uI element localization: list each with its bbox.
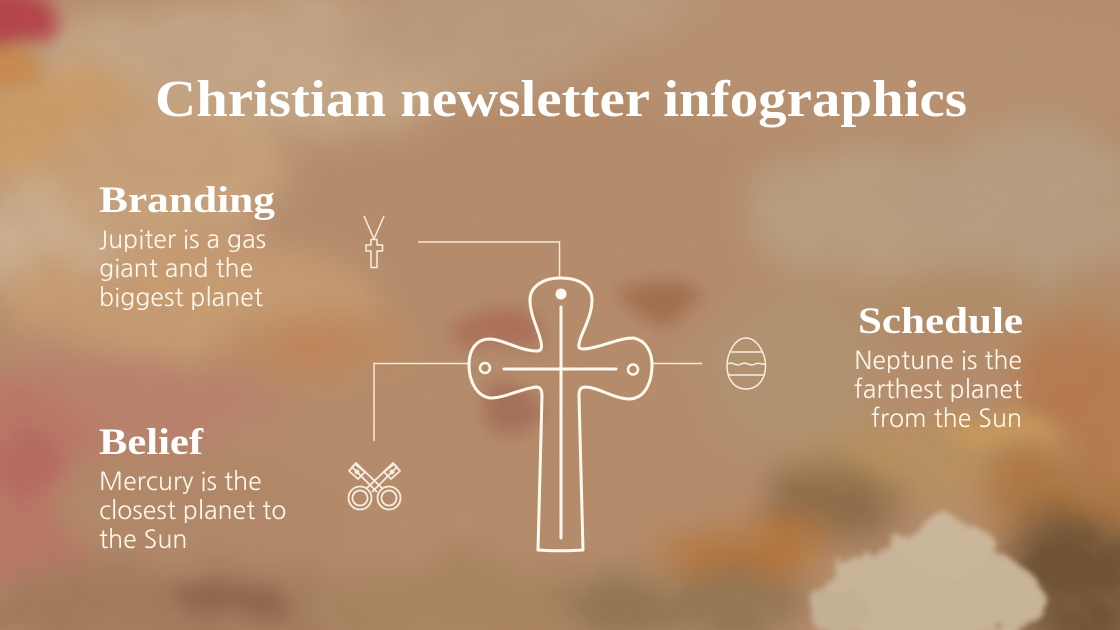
text block: Belief xyxy=(99,422,286,552)
body: Schedule: farthest planet xyxy=(854,377,1022,402)
text block: Schedule xyxy=(854,301,1023,431)
icon: egg xyxy=(727,338,766,389)
body: Schedule: Neptune is the xyxy=(854,348,1022,373)
heading: Belief: Belief xyxy=(99,422,204,463)
body: Belief: Mercury is the xyxy=(99,469,262,494)
body: Belief: the Sun xyxy=(99,527,187,552)
body: Branding: Jupiter is a gas xyxy=(99,227,266,252)
body: Branding: biggest planet xyxy=(99,285,263,310)
icon: necklace xyxy=(364,216,384,268)
body: Branding: giant and the xyxy=(99,256,253,281)
heading: Branding: Branding xyxy=(99,180,276,221)
connector: keys to cross xyxy=(374,364,468,441)
connector: cross to egg xyxy=(652,362,702,364)
body: Belief: closest planet to xyxy=(99,498,286,523)
title: Christian newsletter infographics xyxy=(155,71,967,128)
icon: crossed keys xyxy=(348,463,400,510)
connector: necklace to cross xyxy=(418,242,560,278)
heading: Schedule: Schedule xyxy=(858,301,1023,342)
central cross icon xyxy=(469,278,652,551)
text block: Branding xyxy=(99,180,276,310)
body: Schedule: from the Sun xyxy=(871,406,1022,431)
